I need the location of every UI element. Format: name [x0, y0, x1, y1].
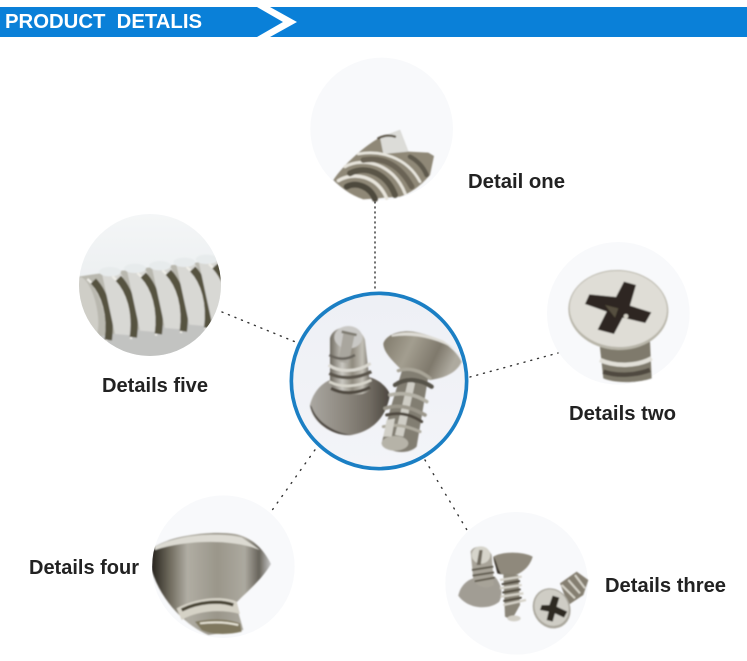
- left screw: [458, 577, 501, 607]
- middle screw: [493, 553, 533, 575]
- panel: details five photo: [79, 214, 221, 356]
- dotted connector lines: [222, 197, 558, 530]
- banner title: PRODUCT DETALIS: [5, 11, 202, 33]
- panel: detail one photo: [310, 58, 453, 200]
- banner: product details: [0, 7, 747, 37]
- panel: details three photo: [445, 512, 588, 655]
- left screw head: [310, 377, 390, 435]
- left screw shank: [330, 327, 371, 395]
- right screw shank: [382, 368, 428, 452]
- panel: details two photo: [547, 242, 690, 385]
- label: details four: Details four: [29, 557, 139, 579]
- right screw head: [383, 331, 462, 380]
- label: details two: Details two: [569, 403, 676, 425]
- central circle ring: [291, 293, 467, 469]
- right screw: [560, 572, 588, 605]
- icon: chevron arrow: [257, 7, 297, 37]
- label: details five: Details five: [102, 375, 208, 397]
- label: details three: Details three: [605, 575, 726, 597]
- panel: details four photo: [152, 514, 272, 636]
- panel: central screws photo: [291, 293, 467, 469]
- label: detail one: Detail one: [468, 171, 565, 193]
